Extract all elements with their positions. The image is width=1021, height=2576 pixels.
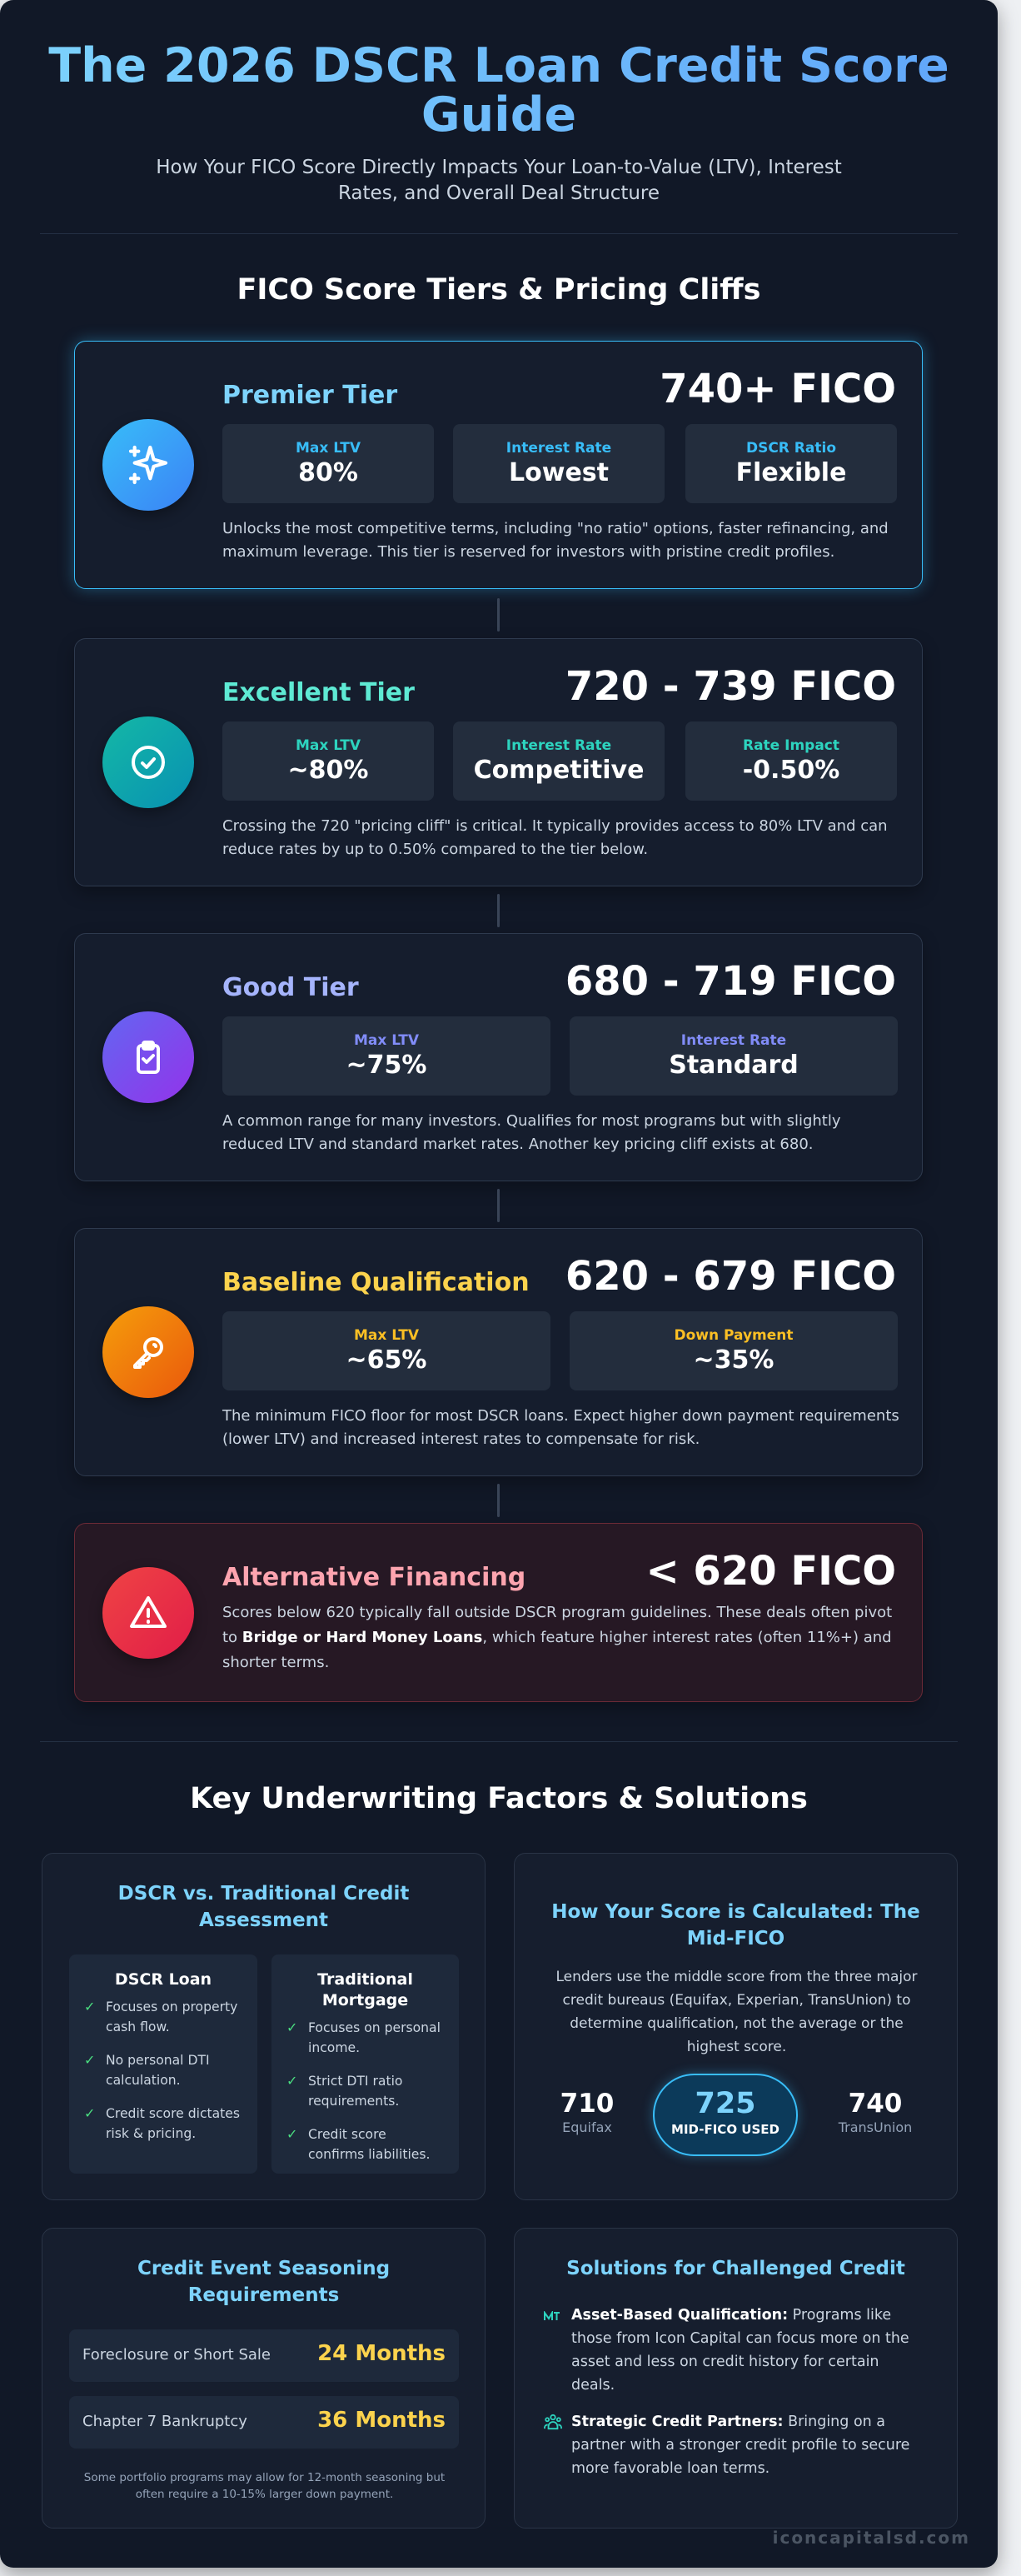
row: bankruptcy: Chapter 7 Bankruptcy xyxy=(82,2413,247,2430)
stat: max ltv xyxy=(222,424,434,503)
stat: interest rate: Standard xyxy=(669,1051,799,1080)
panel title: Solutions for Challenged Credit xyxy=(566,2258,905,2279)
panel title: Credit Event Seasoning xyxy=(137,2258,390,2279)
panel title: How Your Score is Calculated: The xyxy=(551,1901,920,1923)
panel: baseline qualification xyxy=(74,1228,923,1476)
row: foreclosure: Foreclosure or Short Sale xyxy=(82,2346,271,2364)
panel: excellent tier xyxy=(74,638,923,886)
panel: premier tier xyxy=(74,341,923,589)
stat: max ltv: ~80% xyxy=(288,756,368,785)
icon: people xyxy=(544,2414,562,2429)
sub-panel: traditional mortgage: Focuses on personal income. xyxy=(308,2020,441,2055)
fico range: 620 - 679 FICO xyxy=(565,1253,896,1300)
tier name: Excellent Tier xyxy=(222,678,415,707)
tier name: Good Tier xyxy=(222,973,359,1002)
tier name: Baseline Qualification xyxy=(222,1268,530,1297)
fico range: < 620 FICO xyxy=(645,1548,896,1595)
stat: rate impact xyxy=(685,721,897,801)
panel title xyxy=(118,1883,409,1931)
tier name: Alternative Financing xyxy=(222,1563,525,1592)
stat: max ltv: Max LTV xyxy=(296,440,361,457)
fico range: 680 - 719 FICO xyxy=(565,958,896,1005)
panel title: Requirements xyxy=(188,2284,339,2306)
item: asset-based: Asset-Based Qualification: Programs like those from Icon Capital can focus more on the asset and less on credit history for certain deals. xyxy=(571,2307,909,2394)
icon: clipboard xyxy=(102,1011,194,1103)
fico range: 740+ FICO xyxy=(660,366,896,412)
icon: warning xyxy=(102,1567,194,1659)
stat: interest rate: Interest Rate xyxy=(681,1032,786,1049)
stat: down payment xyxy=(570,1311,898,1390)
score: equifax xyxy=(560,2089,614,2135)
stat: interest rate: Competitive xyxy=(474,756,644,785)
title xyxy=(0,42,998,140)
subtitle: How Your FICO Score Directly Impacts Your Loan-to-Value (LTV), Interest Rates, and Overall Deal Structure xyxy=(156,157,842,204)
stat: dscr ratio xyxy=(685,424,897,503)
score: mid-fico pill: 725 xyxy=(695,2087,756,2120)
sub-panel: DSCR loan: No personal DTI calculation. xyxy=(106,2053,210,2088)
panel title xyxy=(551,1901,920,1949)
stat: max ltv: Max LTV xyxy=(354,1327,419,1344)
stat: dscr ratio: Flexible xyxy=(736,458,846,487)
sub-panel: DSCR loan: Credit score dictates risk & pricing. xyxy=(106,2106,240,2141)
description: A common range for many investors. Qualifies for most programs but with slightly reduced LTV and standard market rates. Another key pricing cliff exists at 680. xyxy=(222,1112,841,1153)
fico range: 720 - 739 FICO xyxy=(565,663,896,710)
stat: rate impact: Rate Impact xyxy=(743,737,839,754)
row: foreclosure: 24 Months xyxy=(317,2341,446,2366)
score: equifax: Equifax xyxy=(562,2119,612,2135)
panel: alternative financing xyxy=(74,1523,923,1702)
stat: interest rate: Interest Rate xyxy=(506,440,611,457)
row: bankruptcy: 36 Months xyxy=(317,2408,446,2433)
panel: mid-fico xyxy=(514,1853,958,2200)
stat: interest rate xyxy=(570,1016,898,1096)
panel title: Assessment xyxy=(199,1910,328,1931)
panel: good tier xyxy=(74,933,923,1181)
stat: max ltv: Max LTV xyxy=(296,737,361,754)
icon: chart xyxy=(544,2311,560,2320)
score: transunion: TransUnion xyxy=(839,2119,912,2135)
sub-panel: DSCR loan: Focuses on property cash flow. xyxy=(106,1999,237,2034)
heading: FICO tiers: FICO Score Tiers & Pricing Cliffs xyxy=(237,273,761,307)
icon: key xyxy=(102,1306,194,1398)
panel: DSCR vs traditional xyxy=(42,1853,486,2200)
description: The minimum FICO floor for most DSCR loans. Expect higher down payment requirements (lower LTV) and increased interest rates to compensate for risk. xyxy=(222,1407,899,1448)
stat: max ltv: 80% xyxy=(298,458,358,487)
stat: down payment: Down Payment xyxy=(674,1327,794,1344)
sub-panel: traditional mortgage: Credit score xyxy=(308,2127,386,2142)
item: strategic partners: Strategic Credit Partners: Bringing on a partner with a stronger credit profile to secure more favorable loan terms. xyxy=(571,2414,909,2477)
stat: interest rate xyxy=(453,721,665,801)
stat: max ltv xyxy=(222,721,434,801)
sub-panel: traditional mortgage: Traditional xyxy=(317,1970,413,1989)
stat: interest rate xyxy=(453,424,665,503)
title: The 2026 DSCR Loan Credit Score xyxy=(48,38,949,93)
sub-panel: DSCR loan: DSCR Loan xyxy=(115,1970,212,1989)
stat: rate impact: -0.50% xyxy=(743,756,839,785)
icon: check circle xyxy=(102,716,194,808)
explanation text: Lenders use the middle score from the three major credit bureaus (Equifax, Experian, TransUnion) to determine qualification, not the average or the highest score. xyxy=(556,1969,917,2055)
panel: seasoning xyxy=(42,2228,486,2529)
sub-panel: traditional mortgage: confirms liabilities. xyxy=(308,2147,430,2162)
stat: max ltv: ~65% xyxy=(346,1345,426,1375)
panel title: Mid-FICO xyxy=(687,1928,784,1949)
heading: key underwriting: Key Underwriting Factors & Solutions xyxy=(190,1782,808,1815)
stat: max ltv xyxy=(222,1311,550,1390)
row: foreclosure xyxy=(69,2329,459,2382)
score: mid-fico pill xyxy=(653,2074,798,2156)
watermark: iconcapitalsd.com xyxy=(773,2528,970,2548)
score: transunion xyxy=(838,2089,912,2135)
tier name: Premier Tier xyxy=(222,381,397,410)
stat: max ltv: Max LTV xyxy=(354,1032,419,1049)
panel title xyxy=(137,2258,390,2306)
sub-panel: traditional mortgage: Mortgage xyxy=(322,1991,408,2009)
score: mid-fico pill: MID-FICO USED xyxy=(671,2122,779,2137)
icon: sparkle xyxy=(102,419,194,511)
stat: dscr ratio: DSCR Ratio xyxy=(746,440,836,457)
sub-panel: traditional mortgage: Strict DTI ratio requirements. xyxy=(308,2074,402,2109)
stat: max ltv: ~75% xyxy=(346,1051,426,1080)
stat: interest rate: Interest Rate xyxy=(506,737,611,754)
panel title: DSCR vs. Traditional Credit xyxy=(118,1883,409,1905)
panel: solutions xyxy=(514,2228,958,2529)
description: Scores below 620 typically fall outside DSCR program guidelines. These deals often pivot to Bridge or Hard Money Loans, which feature higher interest rates (often 11%+) and shorter terms. xyxy=(222,1604,892,1671)
score: transunion: 740 xyxy=(849,2089,902,2119)
row: bankruptcy xyxy=(69,2396,459,2449)
description: Crossing the 720 "pricing cliff" is critical. It typically provides access to 80% LTV and can reduce rates by up to 0.50% compared to the tier below. xyxy=(222,817,888,858)
footnote: Some portfolio programs may allow for 12-month seasoning but often require a 10-15% larger down payment. xyxy=(84,2471,445,2501)
stat: interest rate: Lowest xyxy=(509,458,609,487)
title: Guide xyxy=(421,87,576,142)
stat: down payment: ~35% xyxy=(694,1345,774,1375)
sub-panel: DSCR loan xyxy=(69,1954,257,2174)
score: equifax: 710 xyxy=(560,2089,614,2119)
description: Unlocks the most competitive terms, including "no ratio" options, faster refinancing, and maximum leverage. This tier is reserved for investors with pristine credit profiles. xyxy=(222,520,889,561)
sub-panel: traditional mortgage xyxy=(271,1954,459,2174)
stat: max ltv xyxy=(222,1016,550,1096)
